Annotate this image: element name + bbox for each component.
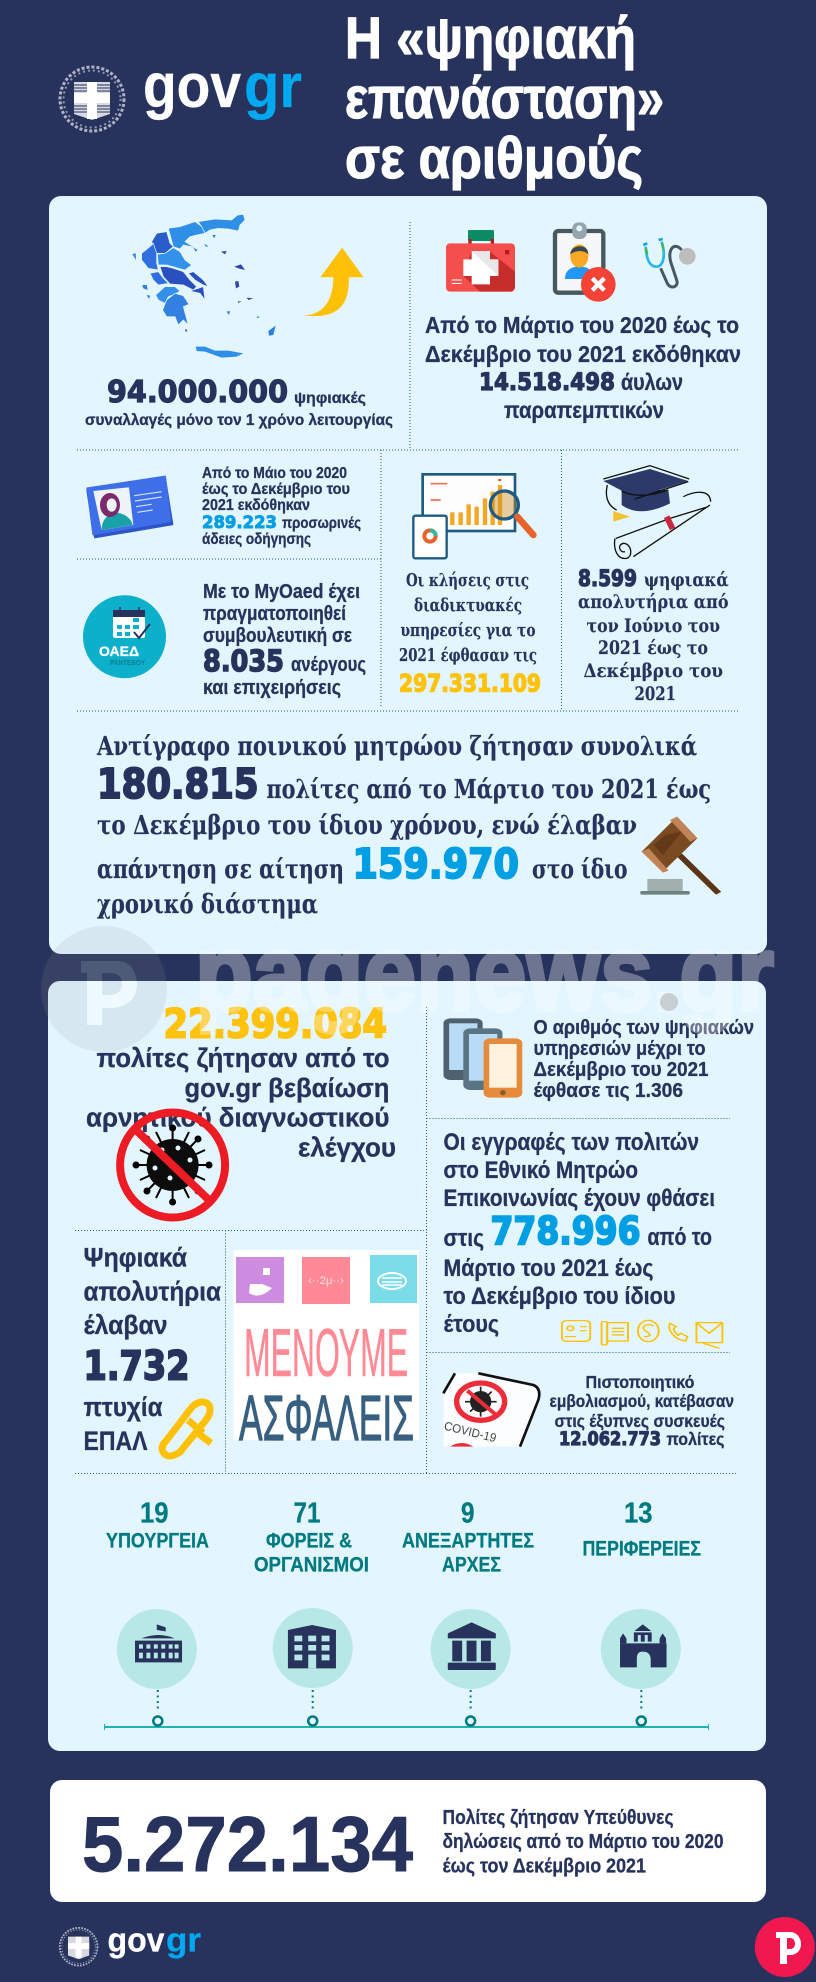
text: MyOaed consultation (203, 581, 366, 699)
image: covid certificate phone: COVID-19 (443, 1419, 498, 1445)
icon: graduation cap and diploma (603, 466, 711, 558)
text: online service calls: υπηρεσίες για το (400, 620, 536, 641)
text: number of digital services (534, 1017, 754, 1102)
text: declarations caption: έως τον Δεκέμβριο 2021 (442, 1856, 646, 1878)
title: σε αριθμούς (345, 126, 643, 191)
text: 94.000.000 transactions: συναλλαγές μόνο τον 1 χρόνο λειτουργίας (85, 412, 393, 429)
text: referrals: Δεκέμβριο του 2021 εκδόθηκαν (425, 341, 741, 367)
text: national communication registry: έτους (444, 1311, 499, 1338)
text: 94.000.000 transactions (85, 375, 393, 429)
text: referrals: 14.518.498 (479, 368, 615, 396)
stat: 9 independent authorities (402, 1498, 534, 1576)
icon: diploma pin (162, 1402, 211, 1456)
text: vaccination certificate: πολίτες (666, 1429, 724, 1449)
footer wordmark: gr (166, 1922, 201, 1960)
footer wordmark (108, 1922, 201, 1960)
text: online service calls (399, 570, 541, 698)
icons: contact methods (562, 1320, 722, 1348)
text: national communication registry: το Δεκέμβριο του ίδιου (444, 1283, 676, 1310)
text: vaccination certificate: 12.062.773 (559, 1428, 661, 1450)
stat: 71 agencies and organisations: ΦΟΡΕΙΣ & (266, 1530, 352, 1552)
text: digital diplomas: 2021 έως το (598, 637, 708, 659)
text: referrals: Από το Μάρτιο του 2020 έως το (425, 312, 739, 338)
title (345, 6, 664, 191)
text: criminal record copies: 180.815 (97, 760, 258, 808)
text: declarations caption (442, 1807, 724, 1878)
text: digital diplomas: τον Ιούνιο του (586, 615, 720, 637)
text: digital diplomas: ψηφιακά (644, 569, 729, 591)
logo: govgr header (60, 52, 302, 131)
text: EPAL diplomas: απολυτήρια (84, 1276, 221, 1306)
text: national communication registry: Οι εγγραφές των πολιτών (444, 1129, 699, 1156)
footer wordmark: gov (108, 1922, 165, 1960)
map: Greece (132, 214, 276, 358)
icon: no virus (120, 1112, 225, 1218)
text: referrals (425, 312, 741, 423)
panel: digital statistics 2 (48, 981, 766, 1751)
image: stay safe poster: ΑΣΦΑΛΕΙΣ (239, 1382, 414, 1454)
text: number of digital services: έφθασε τις 1.306 (534, 1080, 683, 1102)
stat: 19 ministries (106, 1498, 209, 1552)
text: 22.399.084 test certificates: ελέγχου (298, 1132, 396, 1162)
logo: footer govgr (60, 1922, 201, 1966)
text: 22.399.084 test certificates: πολίτες ζήτησαν από το (96, 1043, 390, 1073)
icon: myOAED badge: ΡΑΝΤΕΒΟΥ (110, 660, 145, 667)
text: 22.399.084 test certificates (86, 1002, 396, 1162)
text: EPAL diplomas: ΕΠΑΛ (84, 1426, 148, 1456)
icon: greek emblem (60, 67, 124, 131)
image: stay safe poster: ΜΕΝΟΥΜΕ (244, 1315, 408, 1391)
icon: stethoscope (643, 239, 696, 287)
text: temporary licences (202, 465, 361, 548)
text: MyOaed consultation: και επιχειρήσεις (203, 677, 341, 699)
icon: clipboard with doctor and rejection mark (555, 222, 616, 302)
text: criminal record copies: 159.970 (352, 840, 519, 888)
text: number of digital services: Ο αριθμός των ψηφιακών (534, 1017, 754, 1039)
text: MyOaed consultation: Με το MyOaed έχει (203, 581, 360, 603)
text: digital diplomas: Δεκέμβριο του (584, 660, 723, 682)
text: national communication registry (444, 1129, 715, 1338)
text: national communication registry: Μάρτιο του 2021 έως (444, 1255, 654, 1282)
stat: 13 regions: ΠΕΡΙΦΕΡΕΙΕΣ (582, 1538, 701, 1560)
logo wordmark (143, 52, 302, 121)
text: referrals: άυλων (621, 369, 683, 395)
stat: 19 ministries: 19 (140, 1498, 168, 1530)
logo wordmark: gr (244, 52, 302, 121)
text: temporary licences: 289.223 (202, 513, 277, 533)
text: vaccination certificate: εμβολιασμού, κατέβασαν (550, 1391, 734, 1411)
icon: region castle (620, 1624, 667, 1667)
text: declarations caption: Πολίτες ζήτησαν Υπεύθυνες (442, 1807, 674, 1829)
logo: pagenews badge (755, 1917, 815, 1977)
text: online service calls: διαδικτυακές (414, 595, 522, 616)
number: 5.272.134: 5.272.134 (82, 1800, 413, 1888)
text: temporary licences: άδειες οδήγησης (202, 531, 311, 548)
image: covid certificate phone (443, 1373, 539, 1447)
text: criminal record copies: χρονικό διάστημα (97, 890, 318, 920)
logo wordmark: gov (143, 52, 241, 121)
text: 22.399.084 test certificates: αρνητικού διαγνωστικού (86, 1102, 390, 1132)
timeline with pins (104, 1608, 708, 1730)
text: digital diplomas: 2021 (634, 683, 676, 705)
panel: digital statistics 1 (49, 196, 767, 954)
icon: driving licence card (87, 477, 172, 537)
text: 22.399.084 test certificates: 22.399.084 (164, 1002, 387, 1048)
icon: authority columns (448, 1622, 496, 1670)
text: vaccination certificate (550, 1372, 734, 1450)
watermark: pagenews.gr (41, 912, 774, 1052)
text: temporary licences: έως το Δεκέμβριο του (202, 481, 350, 498)
text: temporary licences: 2021 εκδόθηκαν (202, 497, 310, 514)
text: digital diplomas (578, 567, 729, 705)
icon: myOAED badge: ΟΑΕΔ (99, 643, 139, 659)
text: online service calls: 297.331.109 (399, 670, 541, 698)
icon: agency office block (288, 1625, 336, 1668)
icon: myOAED badge (83, 595, 166, 678)
text: national communication registry: 778.996 (490, 1209, 640, 1253)
stat: 9 independent authorities: ΑΝΕΞΑΡΤΗΤΕΣ (402, 1530, 534, 1552)
text: temporary licences: Από το Μάιο του 2020 (202, 465, 347, 482)
panel: responsible declarations (50, 1780, 766, 1902)
text: criminal record copies: Αντίγραφο ποινικού μητρώου ζήτησαν συνολικά (96, 732, 697, 762)
stat: 9 independent authorities: ΑΡΧΕΣ (442, 1554, 501, 1576)
stat: 13 regions (582, 1498, 701, 1560)
text: temporary licences: προσωρινές (282, 515, 361, 532)
image: stay safe poster: ‹··2μ··› (308, 1275, 344, 1287)
text: criminal record copies: πολίτες από το Μάρτιο του 2021 έως (266, 775, 711, 805)
stat: 19 ministries: ΥΠΟΥΡΓΕΙΑ (106, 1530, 209, 1552)
stat: 71 agencies and organisations (254, 1498, 369, 1576)
text: vaccination certificate: στις έξυπνες συσκευές (554, 1411, 725, 1432)
text: vaccination certificate: Πιστοποιητικό (586, 1372, 694, 1392)
text: digital diplomas: απολυτήρια από (578, 591, 728, 613)
icon: gavel (640, 817, 719, 895)
image: stay safe poster (234, 1250, 419, 1454)
text: criminal record copies: στο ίδιο (532, 855, 628, 885)
text: 94.000.000 transactions: 94.000.000 (107, 375, 288, 410)
text: 22.399.084 test certificates: gov.gr βεβαίωση (184, 1073, 390, 1103)
text: national communication registry: Επικοινωνίας έχουν φθάσει (444, 1185, 715, 1212)
text: MyOaed consultation: ανέργους (291, 654, 366, 676)
text: MyOaed consultation: πραγματοποιηθεί (203, 603, 346, 625)
text: online service calls: Οι κλήσεις στις (406, 570, 529, 591)
text: criminal record copies (96, 732, 711, 920)
stat: 71 agencies and organisations: ΟΡΓΑΝΙΣΜΟΙ (254, 1554, 369, 1576)
text: digital diplomas: 8.599 (578, 567, 637, 592)
text: 94.000.000 transactions: ψηφιακές (294, 390, 366, 407)
icon: ministry building (135, 1624, 182, 1662)
text: online service calls: 2021 έφθασαν τις (399, 645, 537, 666)
stat: 71 agencies and organisations: 71 (294, 1498, 320, 1530)
text: national communication registry: από το (648, 1224, 712, 1251)
icon: phones (443, 1018, 522, 1098)
text: declarations caption: δηλώσεις από το Μάρτιο του 2020 (442, 1831, 724, 1853)
icon: analytics tablet and magnifier (413, 474, 533, 558)
stat: 13 regions: 13 (624, 1498, 652, 1530)
text: MyOaed consultation: 8.035 (203, 644, 284, 678)
text: EPAL diplomas: 1.732 (84, 1344, 190, 1390)
text: number of digital services: υπηρεσιών μέχρι το (534, 1038, 706, 1060)
stat: 9 independent authorities: 9 (461, 1498, 474, 1530)
text: EPAL diplomas: πτυχία (84, 1392, 163, 1422)
text: criminal record copies: απάντηση σε αίτηση (97, 855, 344, 885)
title: επανάσταση» (345, 66, 664, 131)
title: Η «ψηφιακή (345, 6, 636, 71)
text: MyOaed consultation: συμβουλευτική σε (203, 625, 352, 647)
icon: first aid kit (446, 230, 515, 292)
text: EPAL diplomas: έλαβαν (84, 1310, 168, 1340)
icon: up arrow (303, 248, 364, 316)
text: national communication registry: στις (444, 1225, 484, 1252)
icon: small greek emblem (60, 1928, 97, 1966)
text: national communication registry: στο Εθνικό Μητρώο (444, 1157, 638, 1184)
text: number of digital services: Δεκέμβριο του 2021 (534, 1059, 708, 1081)
text: EPAL diplomas (84, 1242, 221, 1456)
text: referrals: παραπεμπτικών (504, 397, 664, 423)
text: criminal record copies: το Δεκέμβριο του ίδιου χρόνου, ενώ έλαβαν (97, 811, 637, 841)
text: EPAL diplomas: Ψηφιακά (84, 1242, 187, 1272)
